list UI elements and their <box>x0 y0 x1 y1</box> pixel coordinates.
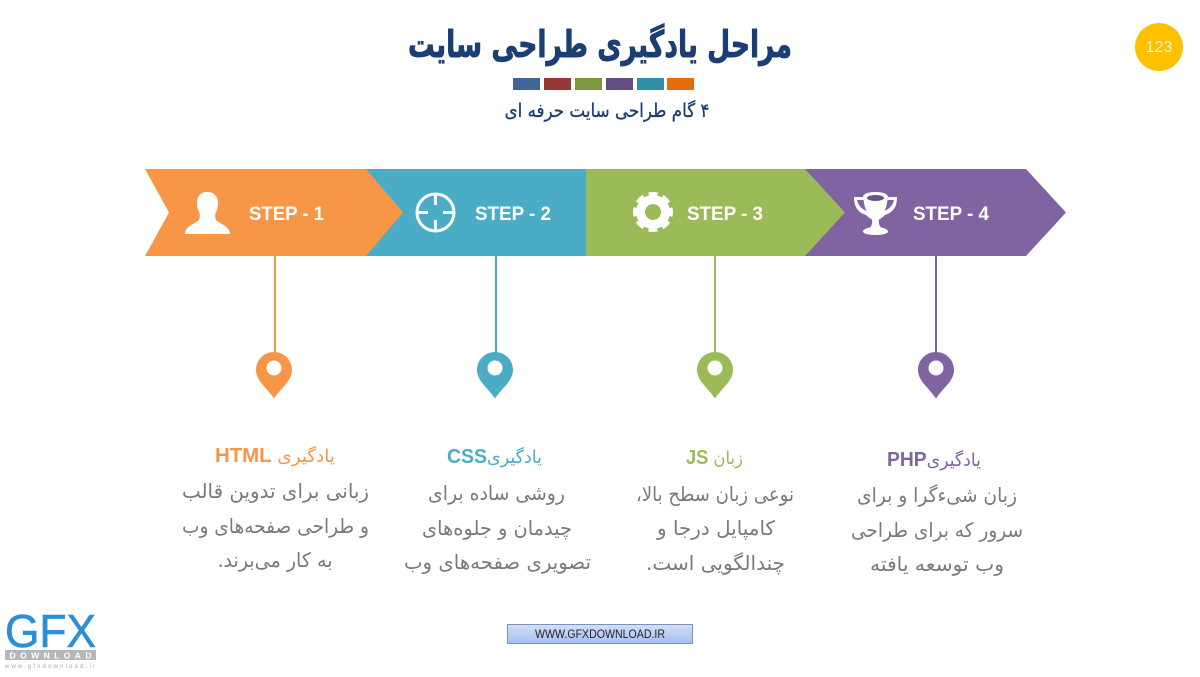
text block: CSS <box>404 446 591 574</box>
icon: crosshair <box>417 194 454 231</box>
label: step 3: STEP - 3 <box>687 204 763 225</box>
text block: CSS: چیدمان و جلوه‌های <box>422 516 572 540</box>
connector: step 1 <box>274 256 276 354</box>
text block: CSS: روشی ساده برای <box>428 481 565 505</box>
connector: step 2 <box>495 256 497 354</box>
text block: PHP <box>851 449 1023 576</box>
pin: step 2 <box>477 352 513 398</box>
text block: HTML: و طراحی صفحه‌های وب <box>182 514 369 538</box>
text block: JS <box>636 447 794 575</box>
text block: JS: کامپایل درجا و <box>656 516 775 541</box>
text block: CSS: تصویری صفحه‌های وب <box>404 550 591 574</box>
text block: JS: چندالگویی است. <box>646 551 785 575</box>
icon: gear <box>636 194 670 230</box>
icon: person <box>185 192 230 234</box>
pin: step 4 <box>918 352 954 398</box>
arrow segment: step 4 <box>805 169 1066 256</box>
logo: GFX download: www.gfxdownload.ir <box>4 664 95 670</box>
text block: JS: زبان JS <box>686 447 743 469</box>
logo: GFX download: GFX <box>5 605 96 657</box>
text block: PHP: زبان شیءگرا و برای <box>857 483 1017 507</box>
connector: step 3 <box>714 256 716 354</box>
text block: PHP: سرور که برای طراحی <box>851 518 1023 542</box>
pin: step 3 <box>697 352 733 398</box>
text block: HTML: زبانی برای تدوین قالب <box>182 479 369 503</box>
page number badge: 123 <box>1146 39 1172 56</box>
text block: HTML: یادگیری HTML <box>215 445 335 467</box>
pin: step 1 <box>256 352 292 398</box>
text block: HTML <box>182 445 369 572</box>
connector: step 4 <box>935 256 937 354</box>
arrow segment: step 1 <box>145 169 403 256</box>
label: step 4: STEP - 4 <box>913 204 989 225</box>
website button <box>508 624 692 644</box>
label: step 2: STEP - 2 <box>475 204 551 225</box>
icon: trophy <box>854 192 897 235</box>
website button: WWW.GFXDOWNLOAD.IR <box>535 627 665 641</box>
text block: CSS: یادگیریCSS <box>447 446 542 468</box>
page number badge <box>1135 23 1183 71</box>
text block: JS: نوعی زبان سطح بالا، <box>636 482 794 506</box>
logo: GFX download: DOWNLOAD <box>10 650 92 660</box>
arrow segment: step 3 <box>586 169 845 256</box>
title: مراحل یادگیری طراحی سایت <box>408 23 792 66</box>
text block: HTML: به کار می‌برند. <box>218 548 332 572</box>
label: step 1: STEP - 1 <box>249 204 324 225</box>
text block: PHP: وب توسعه یافته <box>870 552 1004 576</box>
colour swatches <box>513 78 694 90</box>
arrow segment: step 2 <box>360 169 586 256</box>
text block: PHP: یادگیریPHP <box>887 449 981 471</box>
subtitle: ۴ گام طراحی سایت حرفه ای <box>504 99 710 122</box>
